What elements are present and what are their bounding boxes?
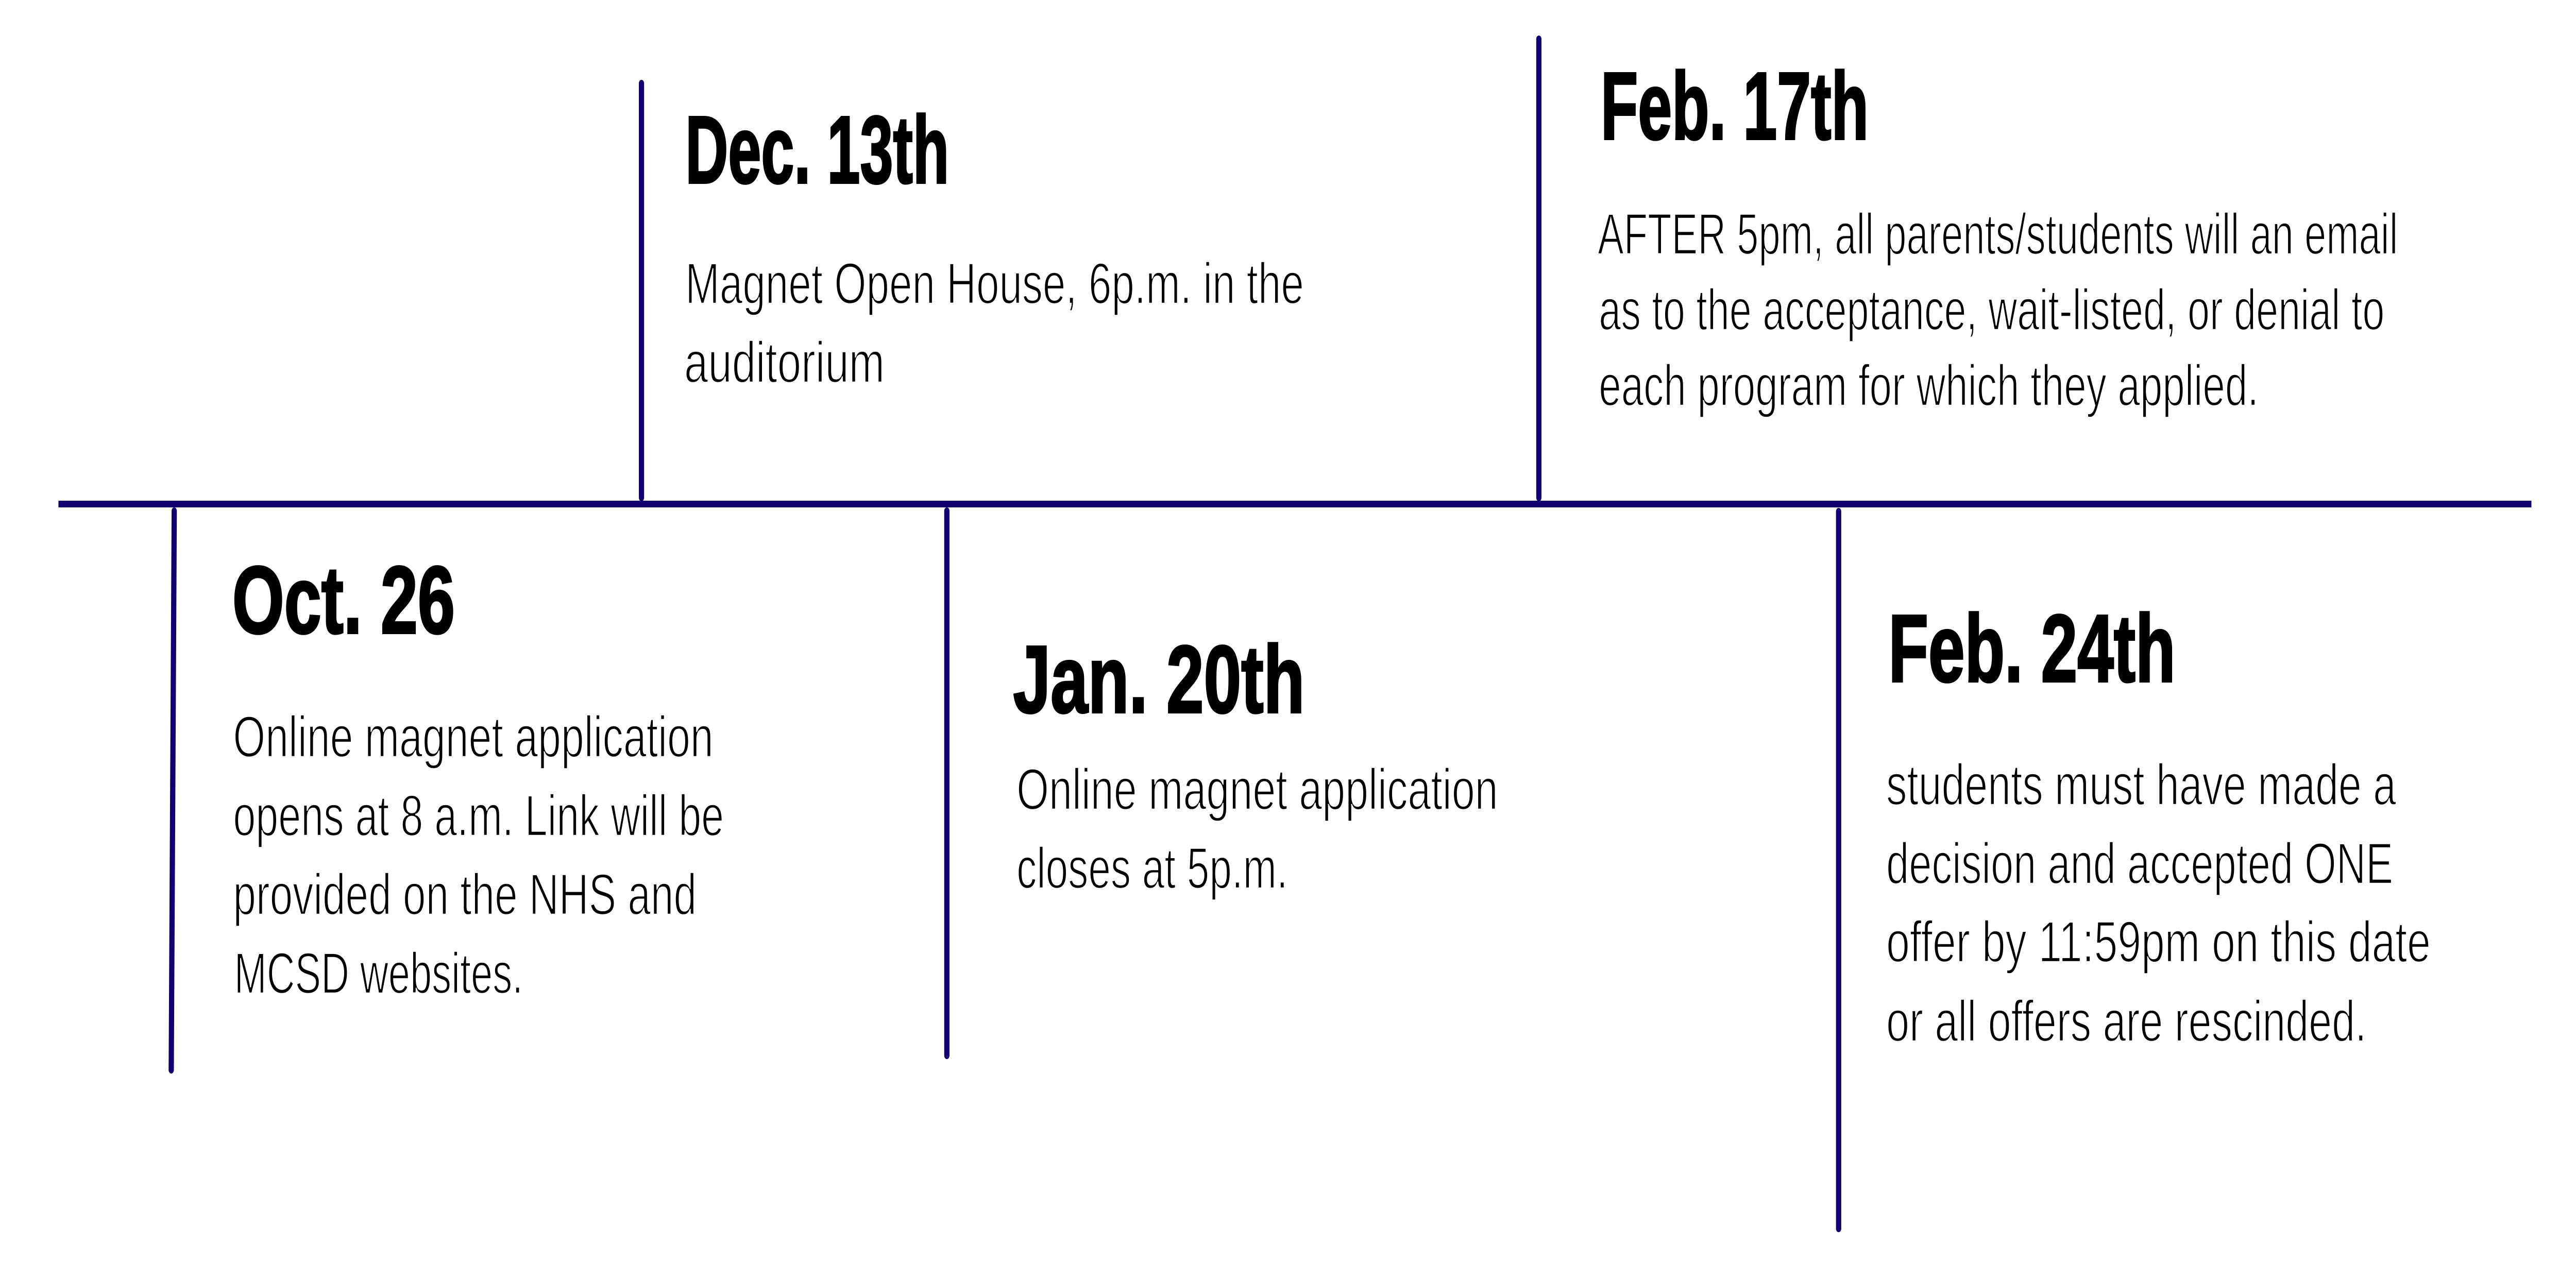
description: Feb. 17th: AFTER 5pm, all parents/students will an email: [1598, 201, 2398, 266]
description: Feb. 17th: each program for which they applied.: [1599, 353, 2259, 418]
description: Dec. 13th: Magnet Open House, 6p.m. in the: [685, 251, 1304, 316]
heading: Dec. 13th: Dec. 13th: [685, 97, 949, 203]
description: Feb. 24th: or all offers are rescinded.: [1886, 989, 2366, 1053]
description: Feb. 17th: [1598, 201, 2398, 418]
description: Feb. 24th: decision and accepted ONE: [1886, 831, 2393, 896]
description: Oct. 26: provided on the NHS and: [233, 862, 697, 927]
horizontal timeline axis: [58, 501, 2531, 507]
event: Jan. 20th: [1013, 626, 1498, 900]
description: Feb. 24th: students must have made a: [1886, 752, 2396, 817]
description: Oct. 26: Online magnet application: [233, 704, 714, 769]
event: Feb. 17th: [1598, 53, 2398, 418]
description: Oct. 26: MCSD websites.: [234, 941, 523, 1006]
description: Feb. 24th: offer by 11:59pm on this date: [1886, 909, 2431, 974]
description: Dec. 13th: [684, 251, 1304, 395]
description: Oct. 26: [233, 704, 724, 1006]
marker line: Oct. 26: [171, 511, 174, 1070]
description: Feb. 17th: as to the acceptance, wait-listed, or denial to: [1599, 277, 2384, 342]
description: Jan. 20th: Online magnet application: [1016, 757, 1498, 822]
heading: Oct. 26: Oct. 26: [232, 547, 455, 654]
event: Oct. 26: [232, 547, 724, 1006]
marker line: Feb. 17th: [1535, 39, 1543, 498]
marker line: Jan. 20th: [943, 511, 951, 1055]
event: Feb. 24th: [1886, 595, 2431, 1053]
heading: Feb. 24th: Feb. 24th: [1888, 595, 2176, 702]
event: Dec. 13th: [684, 97, 1304, 395]
description: Jan. 20th: [1016, 757, 1498, 900]
description: Feb. 24th: [1886, 752, 2431, 1053]
marker line: Dec. 13th: [638, 83, 645, 498]
description: Jan. 20th: closes at 5p.m.: [1016, 836, 1288, 900]
heading: Jan. 20th: Jan. 20th: [1013, 626, 1304, 733]
heading: Feb. 17th: Feb. 17th: [1601, 53, 1869, 160]
marker line: Feb. 24th: [1835, 512, 1842, 1229]
description: Oct. 26: opens at 8 a.m. Link will be: [233, 783, 724, 848]
description: Dec. 13th: auditorium: [684, 330, 885, 395]
